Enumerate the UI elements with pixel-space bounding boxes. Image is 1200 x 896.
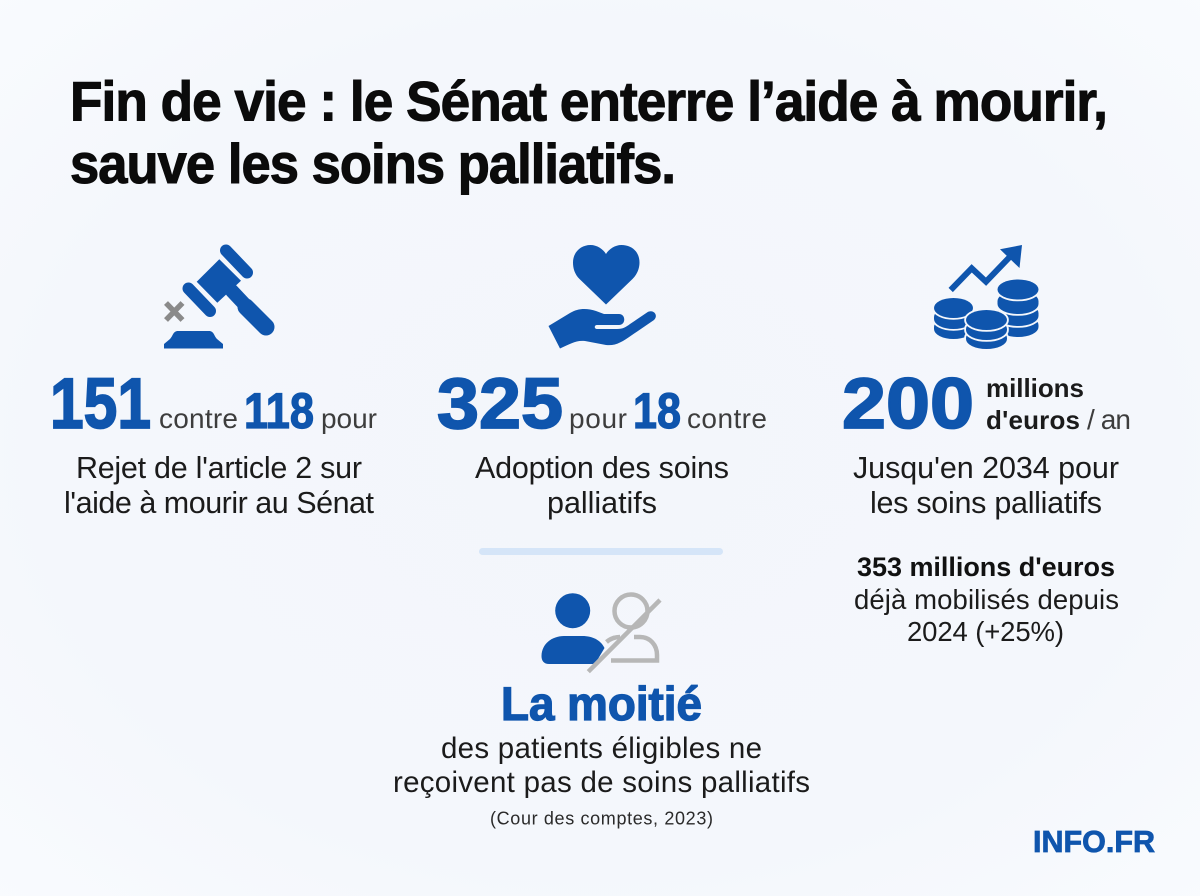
amount: 200: [842, 365, 974, 444]
description: reçoivent pas de soins palliatifs: [393, 766, 810, 799]
description: les soins palliatifs: [870, 486, 1102, 520]
vote figures: 18: [633, 383, 681, 439]
panel: rejet article 2: [50, 250, 377, 520]
description: [393, 732, 810, 799]
panel: adoption soins palliatifs: [437, 245, 767, 520]
amount: millions: [986, 373, 1084, 403]
description: [64, 451, 375, 520]
note: 353 millions: déjà mobilisés depuis: [854, 584, 1119, 615]
note: 353 millions: 353 millions d'euros: [857, 552, 1115, 582]
vote figures: pour: [569, 403, 627, 434]
icon: gavel: [164, 250, 266, 348]
vote figures: 118: [244, 383, 314, 439]
title: Fin de vie : le Sénat enterre l’aide à mourir,: [70, 70, 1107, 132]
vote figures: contre: [159, 403, 238, 434]
heading: La moitié: [501, 677, 702, 730]
source: (Cour des comptes, 2023): [490, 808, 713, 828]
vote figures: [50, 365, 377, 444]
icon: heart in hand: [548, 245, 656, 348]
description: Rejet de l'article 2 sur: [76, 451, 362, 485]
icon: coins with rising arrow: [934, 245, 1038, 349]
description: [475, 451, 729, 520]
note: 353 millions: 2024 (+25%): [907, 616, 1064, 647]
logo: INFO.FR: INFO.FR: [1033, 824, 1155, 859]
icon: persons, one crossed out: [542, 593, 660, 672]
note: 353 millions: [854, 552, 1119, 647]
description: Jusqu'en 2034 pour: [853, 451, 1119, 485]
title: [70, 70, 1107, 195]
description: Adoption des soins: [475, 451, 729, 485]
vote figures: [437, 365, 767, 444]
vote figures: 151: [50, 365, 151, 444]
panel: budget: [842, 245, 1131, 647]
description: l'aide à mourir au Sénat: [64, 486, 375, 520]
panel: la moitié: [393, 593, 810, 828]
amount: [842, 365, 1131, 444]
description: des patients éligibles ne: [441, 732, 762, 765]
vote figures: pour: [321, 403, 377, 434]
vote figures: 325: [437, 365, 563, 444]
description: palliatifs: [547, 486, 657, 520]
vote figures: contre: [687, 403, 767, 434]
title: sauve les soins palliatifs.: [70, 132, 675, 195]
description: [853, 451, 1119, 520]
amount: d'euros: [986, 405, 1080, 435]
amount: / an: [1087, 404, 1131, 435]
